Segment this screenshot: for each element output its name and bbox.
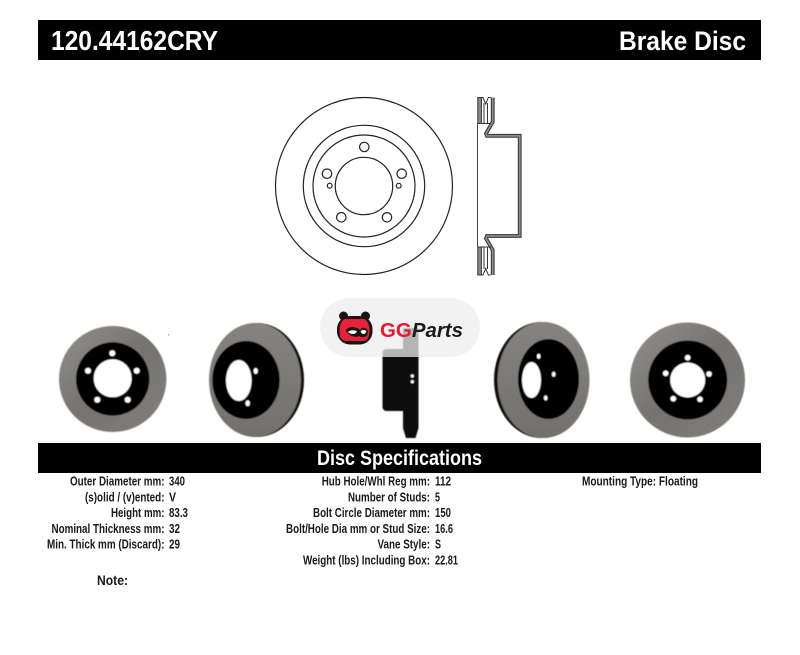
specifications bar	[38, 443, 761, 473]
photo: disc angled left	[209, 323, 304, 437]
specs column 3: Mounting Type: Floating	[582, 474, 698, 488]
line drawing: disc front view	[276, 98, 452, 274]
specs column 1: 83.3	[169, 506, 188, 520]
specs column 2: 22.81	[435, 554, 458, 568]
product type: Brake Disc	[619, 26, 746, 56]
specs column 2: Vane Style:	[378, 538, 430, 552]
stray speck	[168, 334, 169, 336]
note label: Note:	[97, 572, 128, 588]
part number: 120.44162CRY	[51, 25, 218, 56]
specs column 2: Bolt Circle Diameter mm:	[313, 506, 430, 520]
specs column 2: Number of Studs:	[348, 490, 430, 504]
specs column 1: Outer Diameter mm:	[70, 474, 164, 488]
specs column 1: Min. Thick mm (Discard):	[47, 538, 164, 552]
specs column 1: (s)olid / (v)ented:	[85, 490, 164, 504]
specs column 1	[47, 474, 188, 552]
header bar	[38, 20, 761, 60]
specs column 1: Nominal Thickness mm:	[52, 522, 164, 536]
logo wordmark: GGParts	[380, 320, 463, 342]
logo: GGParts	[320, 298, 480, 357]
specs column 2: Weight (lbs) Including Box:	[303, 554, 430, 568]
specs column 2: Bolt/Hole Dia mm or Stud Size:	[286, 522, 430, 536]
specs column 2: 150	[435, 506, 451, 520]
specs column 2: 5	[435, 490, 440, 504]
photo: disc front left	[59, 326, 166, 432]
specs column 2: S	[435, 538, 441, 552]
photo: disc front right	[630, 322, 745, 438]
specs column 2	[286, 474, 458, 568]
icon: red mascot face	[337, 312, 372, 344]
specifications heading: Disc Specifications	[317, 447, 482, 470]
line drawing: disc side profile	[478, 98, 520, 275]
specs column 2: 16.6	[435, 522, 453, 536]
specs column 1: 340	[169, 474, 185, 488]
specs column 2: Hub Hole/Whl Reg mm:	[322, 474, 430, 488]
specs column 1: V	[169, 490, 177, 504]
specs column 1: 32	[169, 522, 180, 536]
photo: disc angled right	[494, 322, 590, 438]
specs column 1: Height mm:	[111, 506, 164, 520]
specs column 2: 112	[435, 474, 451, 488]
specs column 1: 29	[169, 538, 180, 552]
photo: disc side view	[382, 328, 418, 438]
